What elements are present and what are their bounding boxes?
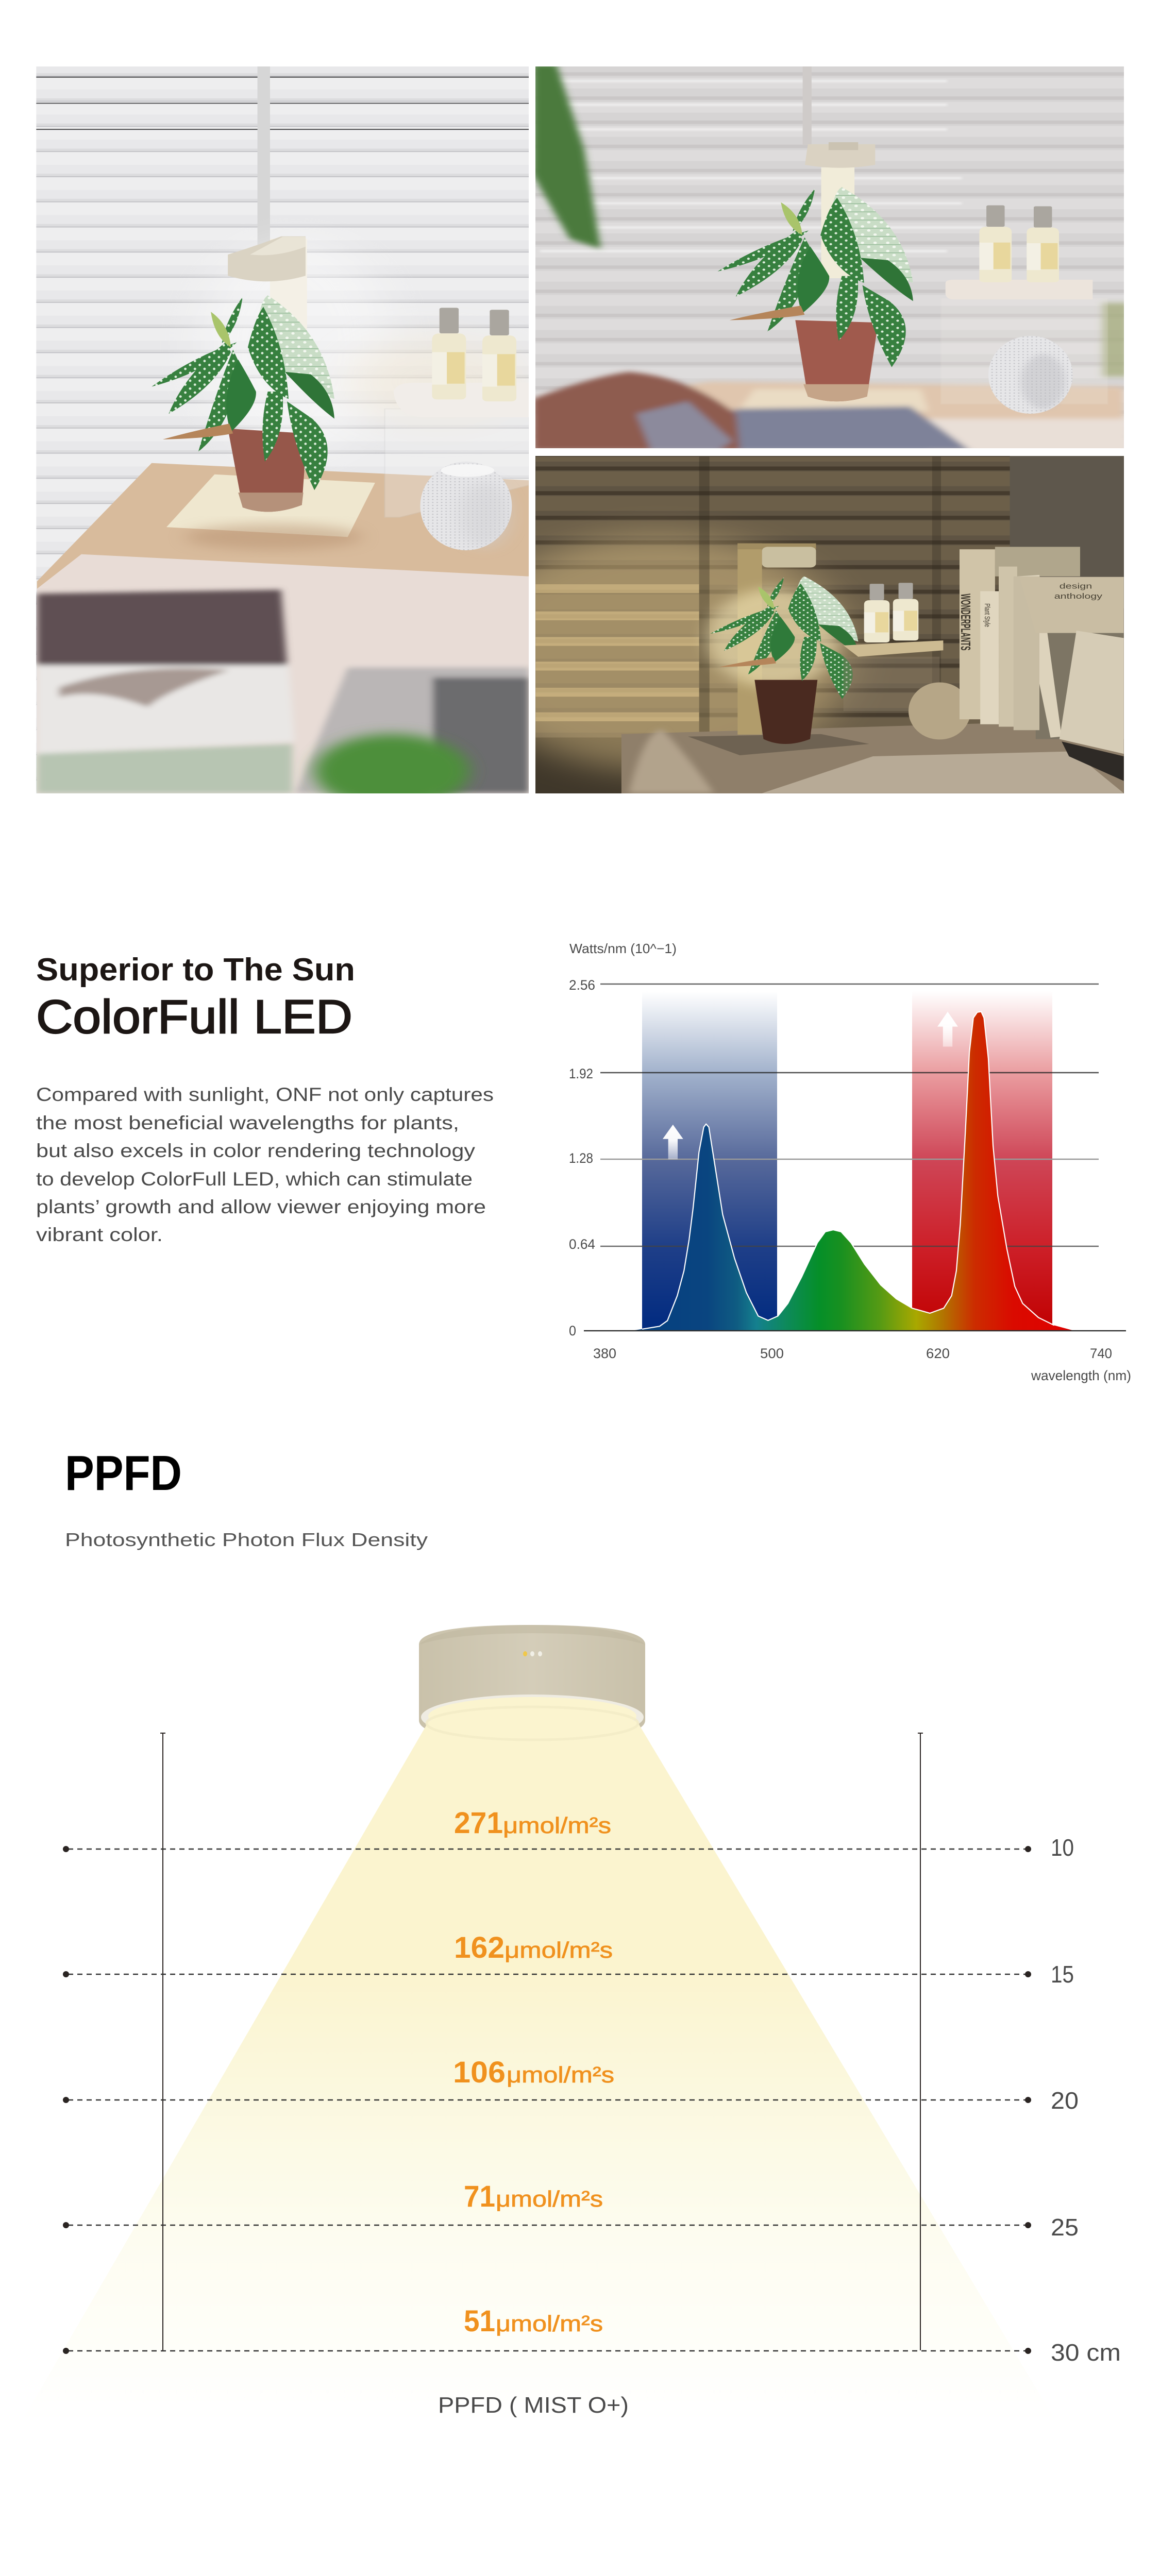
PPFD values (453, 1806, 614, 2338)
axis labels: 740 (1090, 1346, 1112, 1361)
acrylic riser (385, 409, 529, 517)
lamp head (419, 1625, 645, 1740)
text block: colorfull led description: to develop ColorFull LED, which can stimulate (36, 1168, 473, 1190)
text block: colorfull led description: the most beneficial wavelengths for plants, (36, 1112, 459, 1133)
bookshelf stack (995, 547, 1080, 577)
axis labels: wavelength (nm) (1031, 1368, 1131, 1383)
heading: superior to the sun: ColorFull LED (36, 991, 352, 1043)
axis labels: 0.64 (569, 1236, 595, 1252)
distance labels: 10 (1051, 1834, 1074, 1861)
text block: colorfull led description: vibrant color. (36, 1224, 163, 1245)
PPFD values: μmol/m²s (503, 1813, 611, 1838)
heading: superior to the sun (36, 952, 355, 1043)
chart: LED spectrum (569, 941, 1131, 1383)
heading: PPFD: PPFD (65, 1446, 182, 1501)
guide dots (63, 1846, 1031, 2354)
PPFD values: μmol/m²s (507, 2062, 614, 2088)
PPFD values: 271 (454, 1806, 503, 1840)
axis labels: 1.92 (569, 1066, 593, 1081)
text block: colorfull led description: plants’ growth and allow viewer enjoying more (36, 1196, 486, 1217)
distance labels: 20 (1051, 2087, 1079, 2114)
axis labels: 2.56 (569, 977, 595, 993)
text block: colorfull led description: but also excels in color rendering technology (36, 1140, 476, 1161)
PPFD values: μmol/m²s (505, 1938, 613, 1963)
PPFD values: μmol/m²s (496, 2311, 603, 2336)
y axis title: Watts/nm (10^−1) (569, 941, 677, 956)
lower page: color rendering section (0, 2473, 1160, 2576)
photo: plant at night with warm lamp light: anthology (1054, 591, 1103, 600)
PPFD values: μmol/m²s (496, 2187, 603, 2212)
PPFD values: 51 (464, 2304, 495, 2338)
distance labels: 15 (1051, 1961, 1074, 1988)
vertical range lines (160, 1733, 923, 2350)
arrow: blue band up (663, 1125, 683, 1159)
distance guides (68, 1849, 1025, 2351)
axis labels: 380 (593, 1346, 616, 1361)
arrow: red band up (937, 1012, 958, 1046)
text block: colorfull led description: Compared with sunlight, ONF not only captures (36, 1084, 494, 1105)
PPFD values: 162 (454, 1931, 505, 1964)
PPFD values: 71 (464, 2180, 495, 2213)
photo: plant at night with warm lamp light (535, 456, 1124, 793)
axis labels: 620 (926, 1346, 950, 1361)
axis labels: 0 (569, 1323, 576, 1338)
acrylic riser (941, 298, 1107, 404)
blue and red bands (642, 991, 1052, 1331)
light beam (22, 1720, 1056, 2421)
photo: plant at night with warm lamp light: Plant Style (983, 603, 991, 627)
diagram: PPFD light cone (22, 1625, 1121, 2421)
lamp head (228, 236, 306, 281)
axis labels: 500 (760, 1346, 784, 1361)
photo: plant on desk by white blinds (36, 66, 530, 808)
distance labels (1051, 1834, 1121, 2366)
axis labels (569, 977, 1131, 1383)
spectrum curve (630, 1012, 1074, 1331)
subtitle: photosynthetic photon flux density: Photosynthetic Photon Flux Density (65, 1529, 428, 1550)
PPFD values: 106 (453, 2056, 506, 2089)
photo: plant at night with warm lamp light: design (1060, 582, 1092, 590)
axis labels: 1.28 (569, 1150, 593, 1166)
panel: hero photo collage (36, 64, 1128, 808)
humidifier (420, 462, 512, 550)
text block: colorfull led description (36, 1084, 494, 1245)
distance labels: 25 (1051, 2214, 1079, 2241)
photo: plant with hand and book (533, 64, 1128, 453)
diagram caption: PPFD ( MIST O+) (438, 2393, 629, 2418)
photo: plant at night with warm lamp light: WONDERPLANTS (958, 594, 972, 651)
distance labels: 30 cm (1051, 2339, 1121, 2366)
heading: superior to the sun: Superior to The Sun (36, 952, 355, 988)
